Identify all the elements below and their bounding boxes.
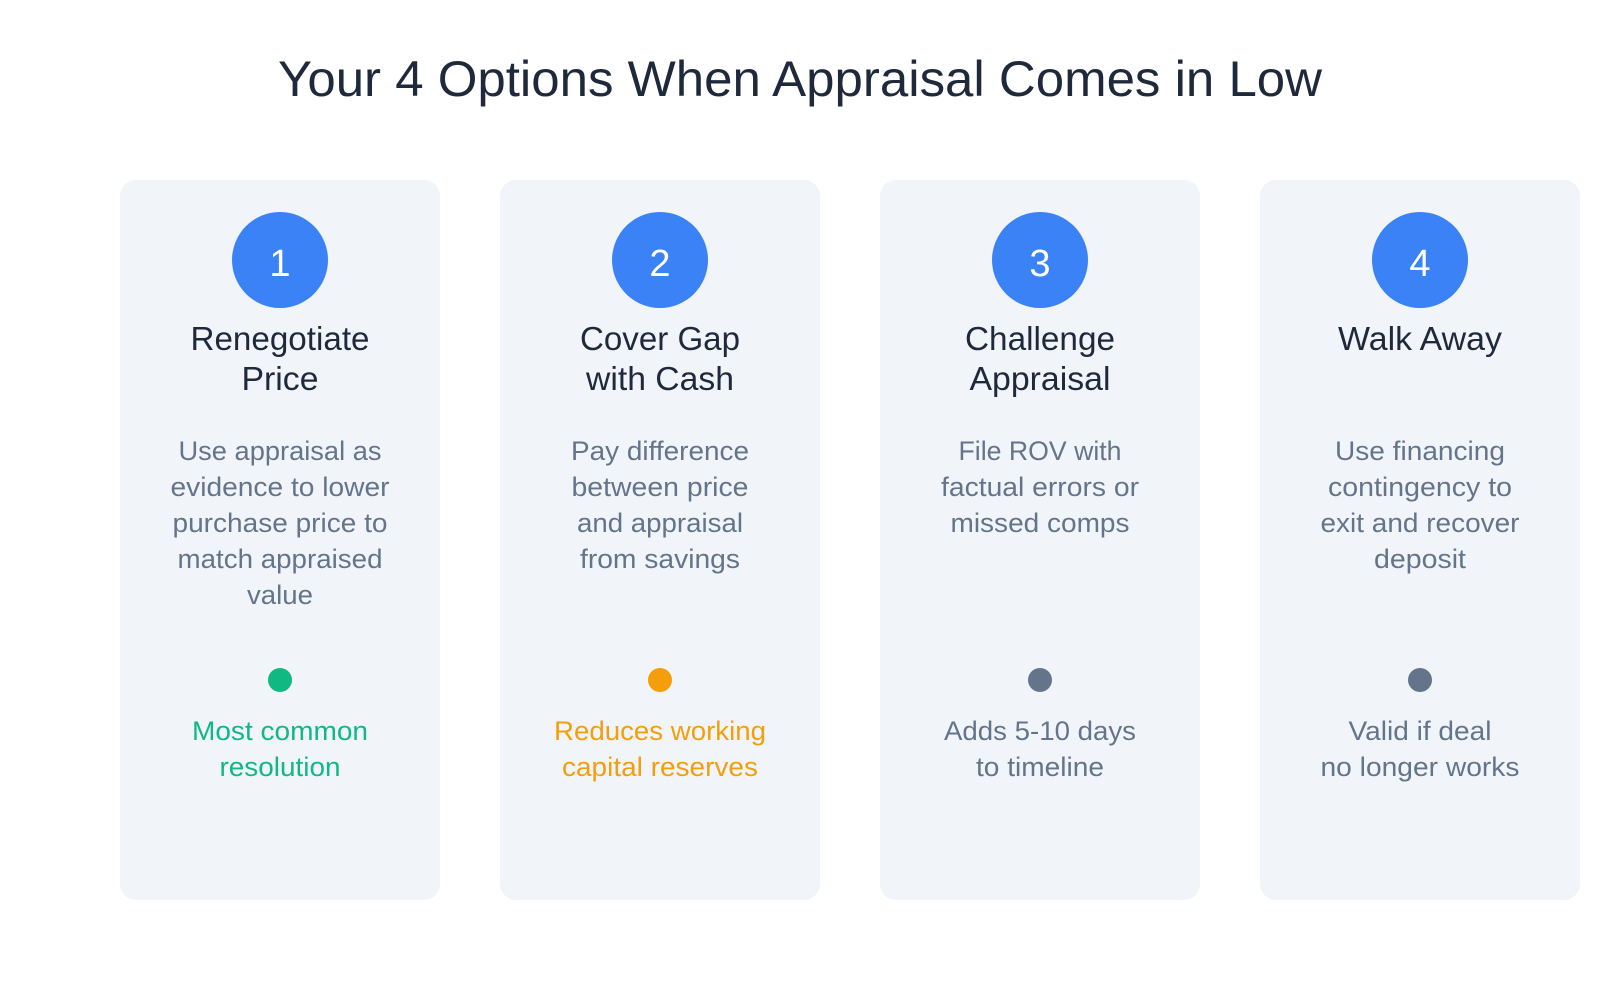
status dot green (268, 668, 292, 692)
panel: option 4 walk away (1260, 180, 1580, 900)
note: adds 5-10 days to timeline: to timeline (976, 752, 1104, 782)
description: purchase price to (172, 508, 388, 538)
note: valid if deal no longer works: no longer works (1320, 752, 1520, 782)
number badge 2 (612, 212, 708, 308)
title: Your 4 Options When Appraisal Comes in Low (278, 50, 1323, 107)
description: factual errors or (941, 472, 1139, 502)
description (1320, 436, 1520, 574)
description: deposit (1374, 544, 1467, 574)
number badge 1: 1 (269, 243, 291, 285)
description: File ROV with (958, 436, 1122, 466)
description: contingency to (1328, 472, 1512, 502)
note: most common resolution (192, 716, 368, 782)
note: most common resolution: resolution (220, 752, 340, 782)
description: between price (572, 472, 748, 502)
description: match appraised (178, 544, 382, 574)
note: reduces working capital reserves: capital reserves (562, 752, 758, 782)
note: reduces working capital reserves: Reduces working (554, 716, 766, 746)
description: from savings (580, 544, 740, 574)
description: Pay difference (571, 436, 749, 466)
description: exit and recover (1320, 508, 1520, 538)
heading: challenge appraisal (965, 321, 1115, 398)
heading: challenge appraisal: Appraisal (970, 361, 1110, 398)
heading: renegotiate price: Price (242, 361, 318, 398)
status dot amber (648, 668, 672, 692)
heading: renegotiate price: Renegotiate (190, 321, 370, 358)
heading: renegotiate price (190, 321, 370, 398)
description: evidence to lower (170, 472, 390, 502)
heading: challenge appraisal: Challenge (965, 321, 1115, 358)
panel: option 3 challenge appraisal (880, 180, 1200, 900)
description: and appraisal (577, 508, 743, 538)
number badge 1 (232, 212, 328, 308)
description (170, 436, 390, 610)
note: adds 5-10 days to timeline (944, 716, 1136, 782)
description: Use financing (1335, 436, 1505, 466)
description: missed comps (950, 508, 1130, 538)
description (571, 436, 749, 574)
number badge 2: 2 (649, 243, 671, 285)
number badge 3 (992, 212, 1088, 308)
note: reduces working capital reserves (554, 716, 766, 782)
heading: cover gap with cash: Cover Gap (580, 321, 740, 358)
panel: option 1 renegotiate price (120, 180, 440, 900)
number badge 4 (1372, 212, 1468, 308)
panel: option 2 cover gap with cash (500, 180, 820, 900)
description: Use appraisal as (178, 436, 382, 466)
status dot slate (1408, 668, 1432, 692)
heading: cover gap with cash: with Cash (585, 361, 734, 398)
status dot slate (1028, 668, 1052, 692)
heading: walk away: Walk Away (1338, 321, 1502, 358)
note: valid if deal no longer works: Valid if deal (1348, 716, 1492, 746)
heading: cover gap with cash (580, 321, 740, 398)
description: value (247, 580, 313, 610)
number badge 3: 3 (1029, 243, 1051, 285)
note: adds 5-10 days to timeline: Adds 5-10 days (944, 716, 1136, 746)
note: valid if deal no longer works (1320, 716, 1520, 782)
number badge 4: 4 (1409, 243, 1431, 285)
description (941, 436, 1139, 538)
note: most common resolution: Most common (192, 716, 368, 746)
